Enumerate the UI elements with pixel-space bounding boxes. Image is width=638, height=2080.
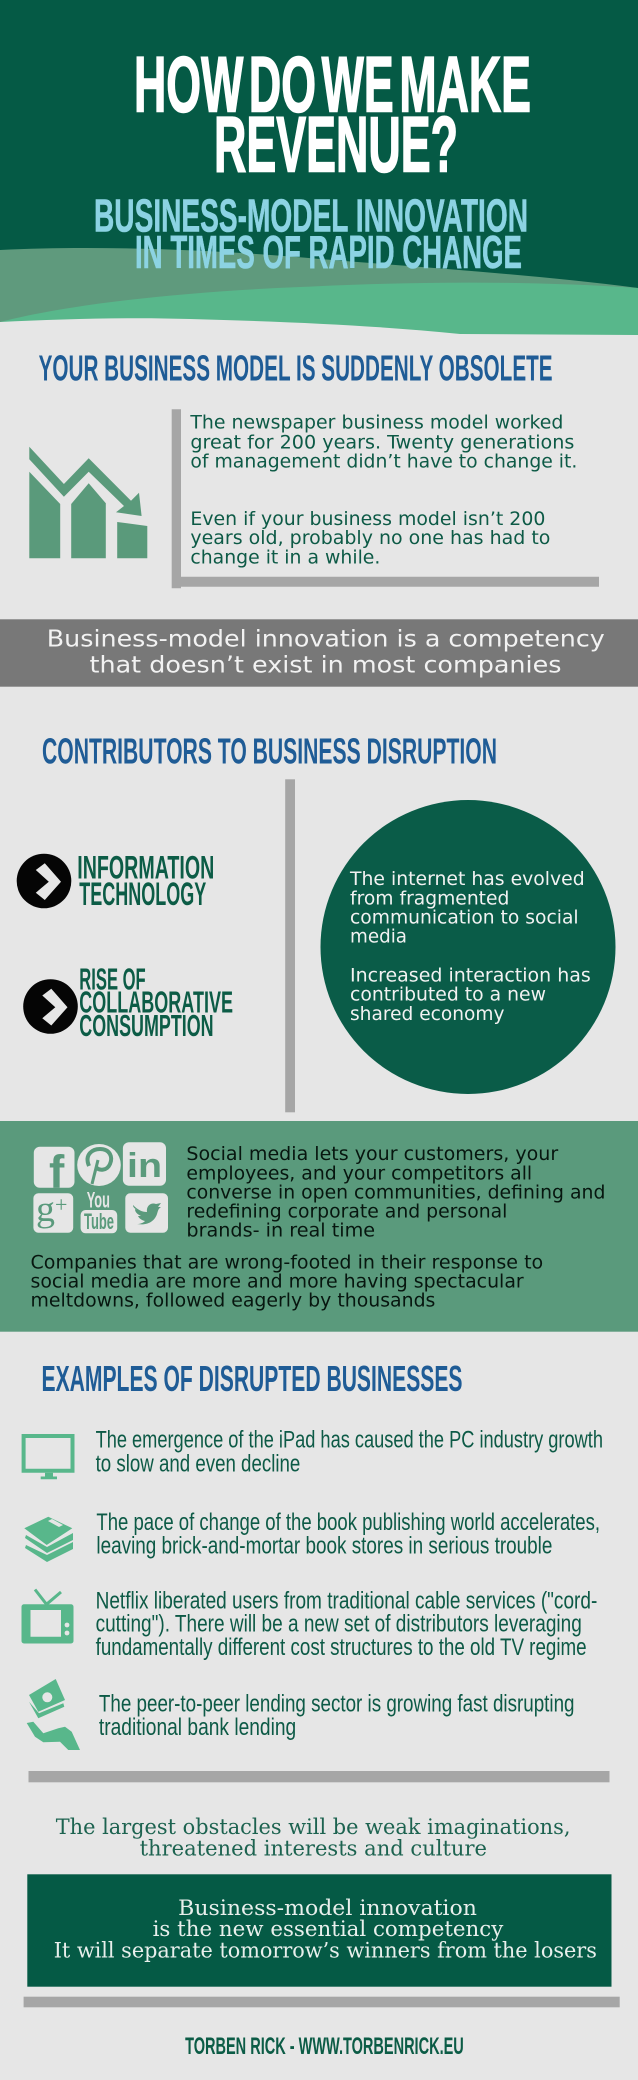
icon: monitor [22, 1434, 75, 1479]
subtitle [94, 190, 528, 278]
icon: youtube [81, 1187, 117, 1234]
text block: social media: meltdowns, followed eagerly by thousands [30, 1290, 435, 1312]
text block: newspaper model: years old, probably no one has had to [190, 527, 550, 549]
text: obstacles [56, 1815, 570, 1862]
circle panel: internet: media [350, 925, 407, 947]
divider bar [24, 1997, 620, 2007]
text block: social media: redefining corporate and personal [186, 1200, 507, 1222]
circle panel: internet: Increased interaction has [350, 965, 591, 987]
text block: social media: Companies that are wrong-footed in their response to [30, 1251, 543, 1273]
icon: linkedin: in [127, 1147, 162, 1185]
icon: google plus: + [55, 1192, 67, 1217]
icon: youtube: Tube [84, 1209, 114, 1234]
title: REVENUE? [214, 100, 458, 188]
icon: chevron circle [17, 854, 71, 908]
text: lending [99, 1691, 575, 1741]
label [77, 849, 214, 912]
bullet: information technology [17, 849, 214, 912]
grey callout band [0, 619, 638, 687]
circle panel: internet [320, 800, 616, 1094]
grey callout band: that doesn’t exist in most companies [90, 653, 562, 679]
text block: newspaper model: change it in a while. [190, 546, 380, 568]
text block: social media: Social media lets your customers, your [186, 1143, 558, 1165]
text block: social media: converse in open communities, defining and [186, 1181, 605, 1203]
circle panel: internet: from fragmented [350, 887, 509, 909]
text block: newspaper model: of management didn’t have to change it. [190, 450, 577, 472]
circle panel: internet: contributed to a new [350, 984, 546, 1006]
callout box: is the new essential competency [153, 1917, 504, 1942]
icon: pinterest [77, 1144, 121, 1186]
vertical divider [285, 779, 295, 1112]
text block: social media: employees, and your competitors all [186, 1162, 532, 1184]
text: lending: traditional bank lending [99, 1714, 296, 1741]
text: obstacles: threatened interests and culture [140, 1837, 487, 1862]
text: pc industry: to slow and even decline [96, 1451, 300, 1478]
icon: facebook [34, 1146, 74, 1198]
bracket divider [172, 409, 599, 588]
label: INFORMATION [77, 849, 214, 885]
label: TECHNOLOGY [79, 876, 206, 912]
header banner [0, 0, 638, 345]
text: book publishing [96, 1509, 600, 1559]
icon: books [24, 1517, 73, 1562]
text block: social media [30, 1143, 605, 1312]
text: netflix [96, 1587, 597, 1661]
icon: money in hand [27, 1679, 80, 1750]
text block: newspaper model: great for 200 years. Twenty generations [190, 431, 574, 453]
label [79, 961, 233, 1043]
icon: twitter [125, 1193, 168, 1233]
text: obstacles: The largest obstacles will be weak imaginations, [56, 1815, 570, 1840]
panel: social media [0, 1121, 638, 1332]
text block: newspaper model [189, 411, 577, 568]
text block: newspaper model: The newspaper business model worked [189, 411, 563, 433]
callout box [27, 1874, 612, 1987]
callout box: It will separate tomorrow’s winners from the losers [54, 1939, 597, 1964]
icon: linkedin [123, 1142, 166, 1186]
text: pc industry [96, 1427, 603, 1478]
grey callout band: Business-model innovation is a competency [47, 627, 605, 653]
text block: social media: brands- in real time [186, 1220, 375, 1242]
callout box: Business-model innovation [178, 1896, 477, 1921]
icon: google plus [33, 1189, 73, 1233]
circle panel: internet: The internet has evolved [349, 868, 585, 890]
text block: newspaper model: Even if your business model isn’t 200 [190, 508, 545, 530]
circle panel: internet: communication to social [350, 906, 579, 928]
label: COLLABORATIVE [79, 985, 233, 1020]
icon: declining chart with arrow [29, 447, 147, 558]
title [134, 40, 531, 188]
icon: facebook: f [49, 1146, 65, 1198]
icon: google plus: g [36, 1189, 55, 1229]
circle panel: internet: shared economy [350, 1003, 504, 1025]
label: RISE OF [79, 961, 146, 996]
label: CONSUMPTION [79, 1008, 214, 1043]
bullet: collaborative consumption [23, 961, 233, 1043]
footer: TORBEN RICK - WWW.TORBENRICK.EU [185, 2033, 464, 2060]
divider bar [28, 1771, 610, 1782]
icon: youtube: You [87, 1187, 110, 1212]
icon: television [22, 1590, 74, 1644]
icon: chevron circle [23, 979, 78, 1034]
text block: social media: social media are more and more having spectacular [30, 1271, 524, 1293]
